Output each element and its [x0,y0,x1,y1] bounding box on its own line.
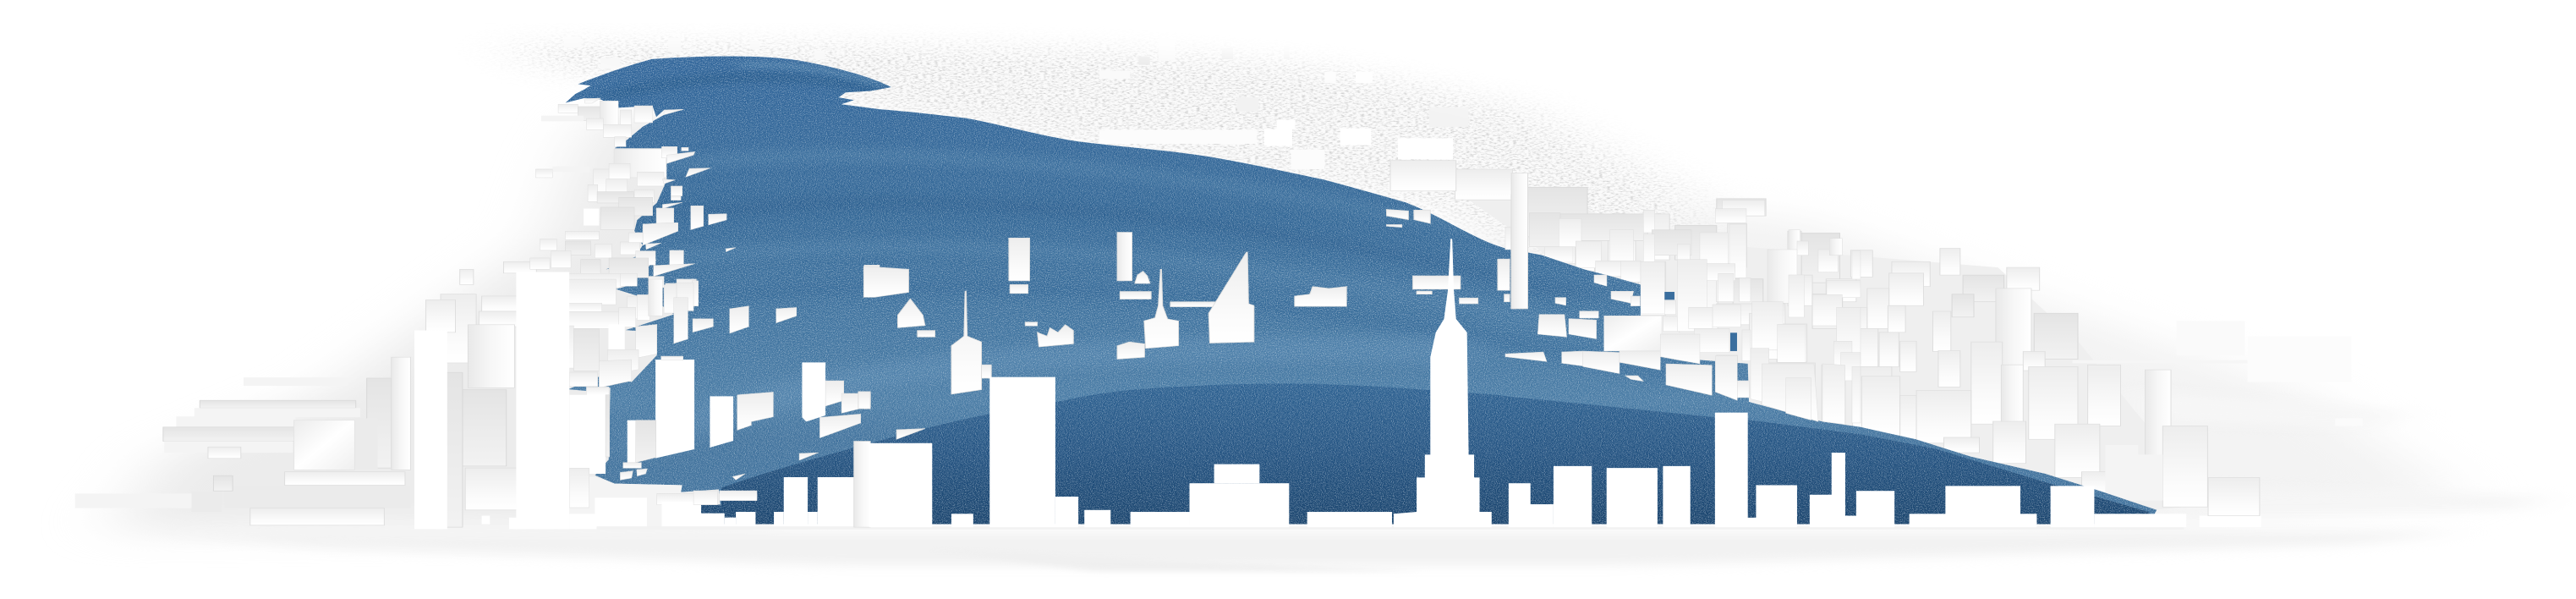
mid city: right-hand Manhattan blocks behind the water [1390,161,2363,512]
water: dark foreground wave [647,383,2149,525]
right waterfront buildings standing in the water [1505,195,1845,425]
water: main surge wave with upper crest [566,56,2157,524]
distant city: low-contrast rooftops at the top of the scene [503,34,1711,254]
floating buildings: rooftops above the water [858,173,1527,439]
foreground skyline: white towers on the waterfront [414,239,2261,530]
far-left buildings and piers [75,261,536,527]
background: soft grey haze behind the city [109,114,2546,571]
landmark: Empire State Building [1394,239,1492,527]
mid-left city blocks along the waterline, upper part [530,98,880,292]
mid-left city blocks along the waterline, lower part [568,279,870,527]
